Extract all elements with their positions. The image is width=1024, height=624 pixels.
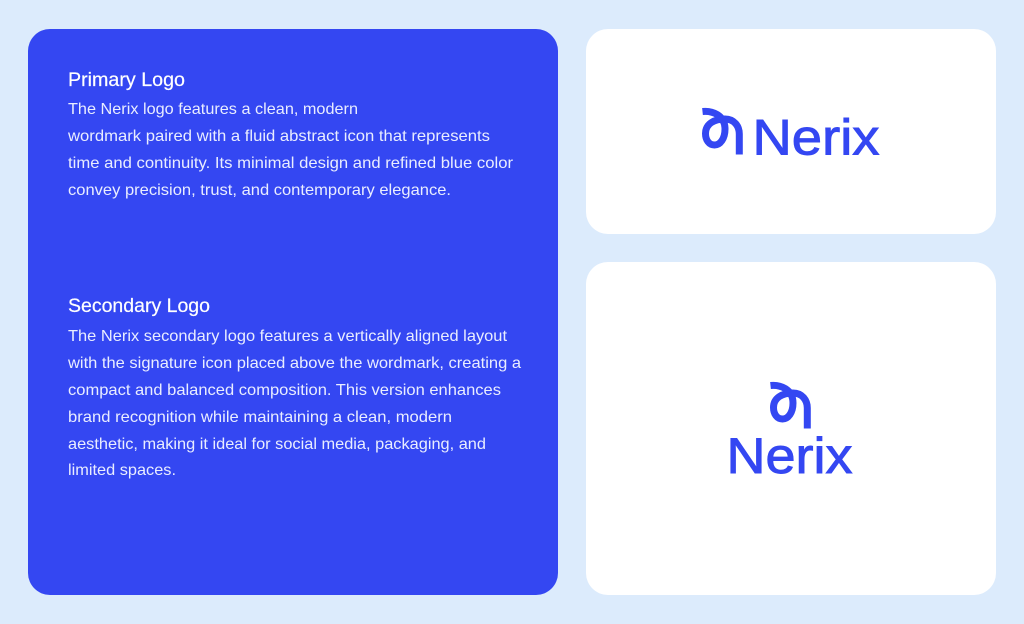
panel: secondary logo card bbox=[586, 262, 996, 595]
text block: secondary logo description bbox=[67, 328, 521, 479]
panel: primary logo card bbox=[586, 29, 996, 234]
text block: primary logo description: wordmark paired with a fluid abstract icon that represents bbox=[67, 128, 490, 145]
text block: primary logo description: The Nerix logo features a clean, modern bbox=[68, 101, 358, 118]
text block: secondary logo description: compact and balanced composition. This version enhances bbox=[68, 382, 501, 399]
panel: logo descriptions bbox=[28, 29, 558, 595]
heading: secondary logo: Secondary Logo bbox=[68, 295, 210, 317]
wordmark: secondary Nerix: Nerix bbox=[726, 427, 852, 484]
icon: primary logo mark bbox=[702, 111, 739, 154]
text block: primary logo description bbox=[67, 101, 514, 199]
text block: primary logo description: convey precision, trust, and contemporary elegance. bbox=[68, 182, 451, 199]
text block: secondary logo description: aesthetic, making it ideal for social media, packaging, and bbox=[68, 436, 486, 453]
text block: primary logo description: time and continuity. Its minimal design and refined blue color bbox=[68, 155, 514, 172]
text block: secondary logo description: with the signature icon placed above the wordmark, creating a bbox=[67, 355, 521, 372]
wordmark: primary Nerix: Nerix bbox=[752, 108, 880, 166]
text block: secondary logo description: The Nerix secondary logo features a vertically aligned layout bbox=[68, 328, 508, 345]
heading: primary logo: Primary Logo bbox=[68, 69, 185, 91]
text block: secondary logo description: brand recognition while maintaining a clean, modern bbox=[68, 409, 452, 426]
text block: secondary logo description: limited spaces. bbox=[68, 462, 176, 479]
icon: secondary logo mark bbox=[770, 385, 807, 428]
